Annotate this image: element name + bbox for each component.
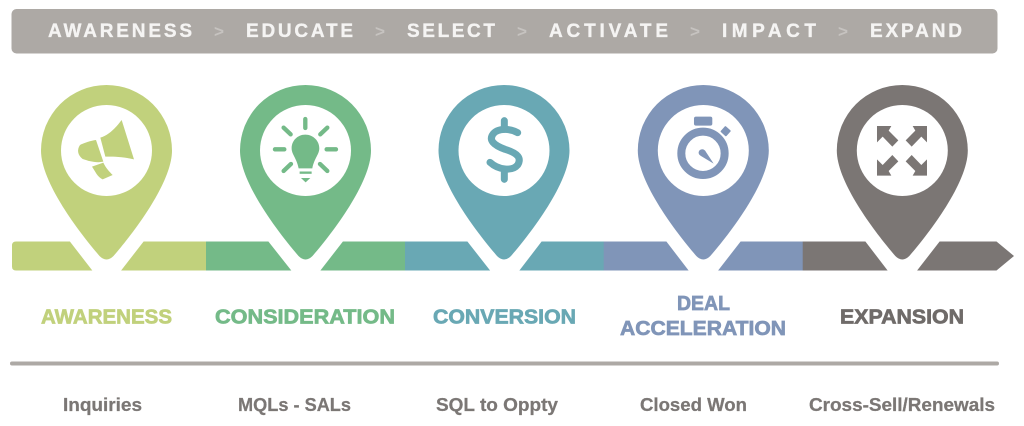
banner stage words: EXPAND (870, 21, 962, 42)
banner chevrons: > (375, 22, 385, 41)
metric: inquiries: Inquiries (63, 395, 142, 415)
banner chevrons: > (838, 22, 848, 41)
stage label: conversion: CONVERSION (433, 306, 576, 329)
icon: expand arrows (877, 126, 927, 176)
divider line (10, 362, 999, 366)
pin: awareness (41, 85, 172, 260)
stage label: consideration: CONSIDERATION (215, 306, 395, 329)
stage label: deal acceleration (620, 292, 786, 340)
banner stage words: IMPACT (722, 21, 816, 42)
banner stage words: SELECT (407, 21, 495, 42)
metric: SQL to opportunity: SQL to Oppty (436, 395, 558, 415)
metric: MQLs to SALs: MQLs - SALs (238, 395, 351, 415)
stage label: deal acceleration: DEAL (677, 292, 730, 315)
pin: consideration (240, 85, 371, 260)
pin: deal acceleration (638, 85, 769, 260)
banner stage words: AWARENESS (48, 21, 192, 42)
header banner (12, 9, 998, 54)
timeline arrow bar (12, 241, 1014, 271)
banner stage words (48, 21, 962, 42)
stage label: deal acceleration: ACCELERATION (620, 317, 786, 340)
banner stage words: EDUCATE (246, 21, 353, 42)
banner chevrons: > (214, 22, 224, 41)
icon: megaphone (78, 120, 134, 179)
banner stage words: ACTIVATE (549, 21, 668, 42)
stage label: expansion: EXPANSION (840, 306, 964, 329)
icon: light bulb (275, 119, 336, 182)
banner chevrons (214, 22, 848, 41)
metric: closed won: Closed Won (640, 395, 747, 415)
stage label: awareness: AWARENESS (41, 306, 172, 329)
banner chevrons: > (517, 22, 527, 41)
pin: expansion (837, 85, 968, 260)
pin: conversion (438, 85, 570, 260)
icon: stopwatch (681, 117, 731, 175)
metric: cross-sell and renewals: Cross-Sell/Renewals (809, 395, 995, 415)
icon: dollar sign (490, 121, 519, 179)
banner chevrons: > (690, 22, 700, 41)
